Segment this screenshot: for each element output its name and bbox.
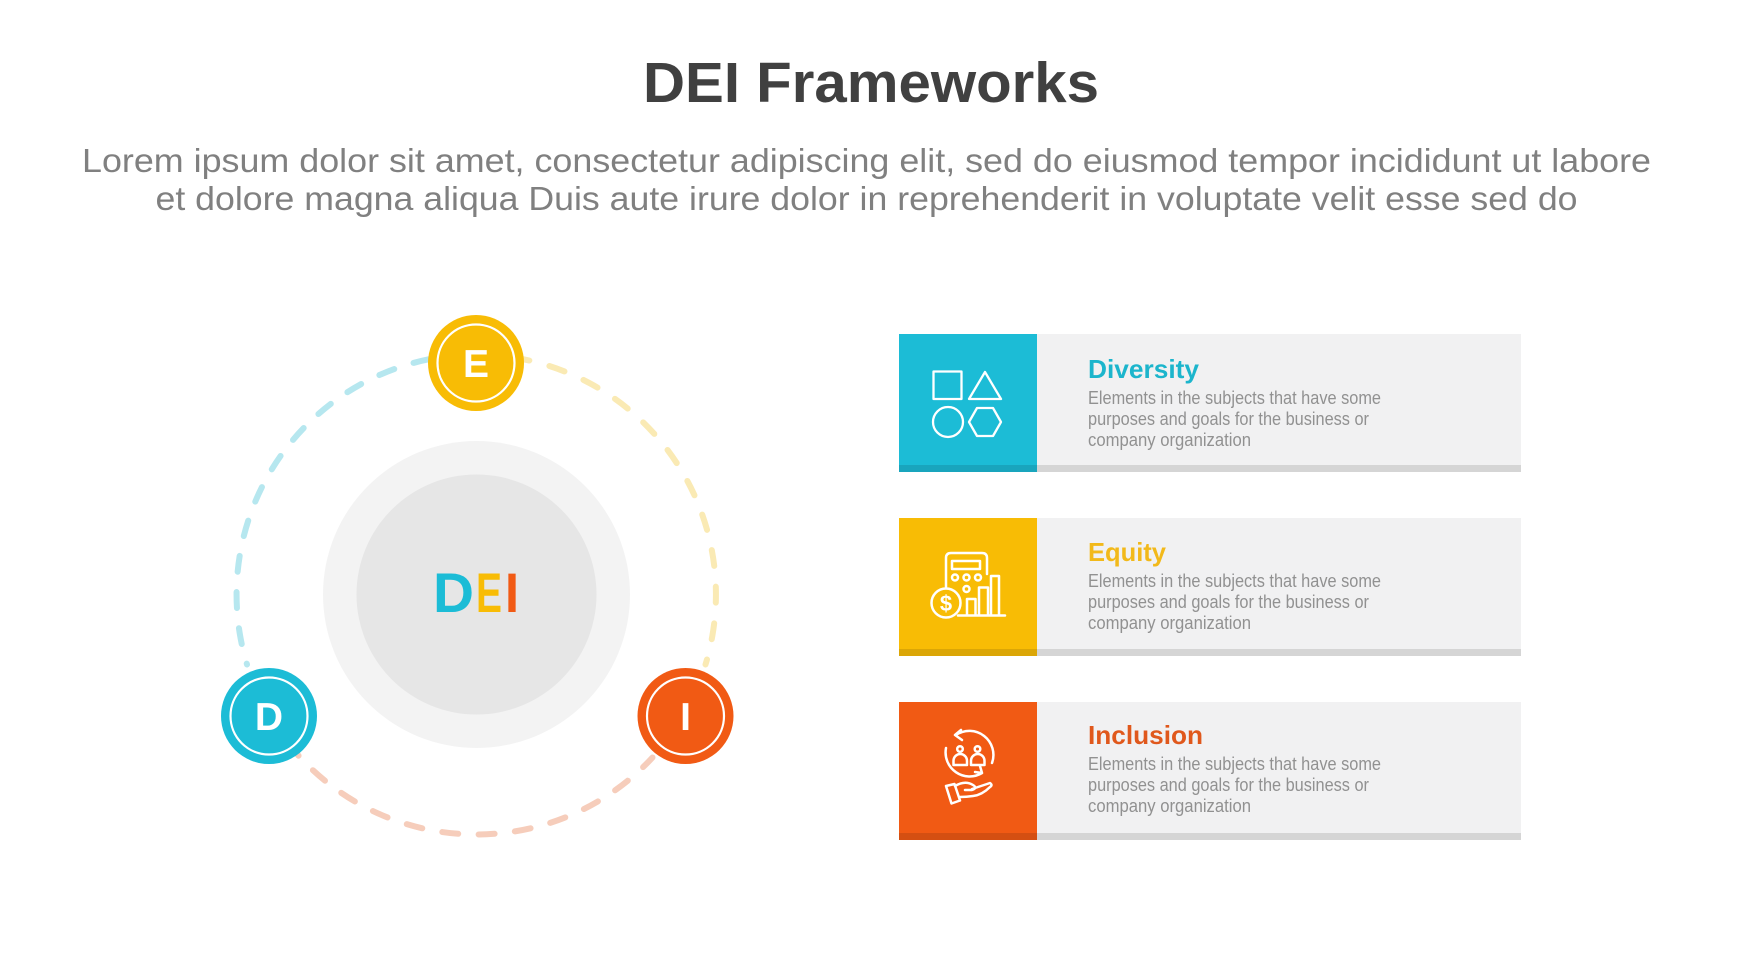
center inner circle — [356, 474, 596, 714]
icon: shapes — [933, 372, 1001, 437]
description: Inclusion — [1088, 754, 1381, 816]
node E — [428, 315, 524, 411]
heading: Equity: Equity — [1088, 537, 1167, 567]
subtitle text — [82, 142, 1651, 217]
center label DEI: I — [505, 561, 519, 624]
description: Diversity: company organization — [1088, 430, 1251, 450]
panel: Inclusion — [899, 702, 1521, 840]
panel: Equity — [899, 518, 1521, 656]
heading: Diversity: Diversity — [1088, 354, 1200, 384]
node I: I — [680, 696, 691, 739]
description: Equity — [1088, 571, 1381, 633]
node E: E — [463, 343, 489, 386]
description: Inclusion: Elements in the subjects that have some — [1088, 754, 1381, 774]
panel: Diversity — [899, 334, 1521, 472]
node D: D — [255, 696, 283, 739]
center label DEI — [433, 561, 519, 624]
description: Equity: purposes and goals for the business or — [1088, 592, 1369, 612]
dashed arc: orange — [298, 754, 652, 834]
subtitle text: et dolore magna aliqua Duis aute irure dolor in reprehenderit in voluptate velit esse sed do — [156, 180, 1578, 217]
icon: calculator and chart: $ — [940, 591, 952, 616]
description: Equity: Elements in the subjects that have some — [1088, 571, 1381, 591]
heading: Inclusion: Inclusion — [1088, 720, 1203, 750]
circular diagram — [221, 315, 734, 834]
description: Inclusion: company organization — [1088, 796, 1251, 816]
description: Diversity: Elements in the subjects that have some — [1088, 388, 1381, 408]
center outer circle — [323, 441, 630, 748]
description: Diversity — [1088, 388, 1381, 450]
center label DEI: D — [433, 561, 474, 624]
node I — [638, 668, 734, 764]
dashed arc: blue — [237, 354, 476, 664]
node D — [221, 668, 317, 764]
title: DEI Frameworks — [643, 51, 1099, 115]
subtitle text: Lorem ipsum dolor sit amet, consectetur adipiscing elit, sed do eiusmod tempor incididunt ut labore — [82, 142, 1651, 179]
icon: people and hand — [946, 730, 993, 804]
description: Diversity: purposes and goals for the business or — [1088, 409, 1369, 429]
description: Equity: company organization — [1088, 613, 1251, 633]
center label DEI: E — [476, 561, 502, 624]
description: Inclusion: purposes and goals for the business or — [1088, 775, 1369, 795]
icon: calculator and chart — [932, 553, 1005, 618]
dashed arc: yellow — [476, 354, 716, 664]
